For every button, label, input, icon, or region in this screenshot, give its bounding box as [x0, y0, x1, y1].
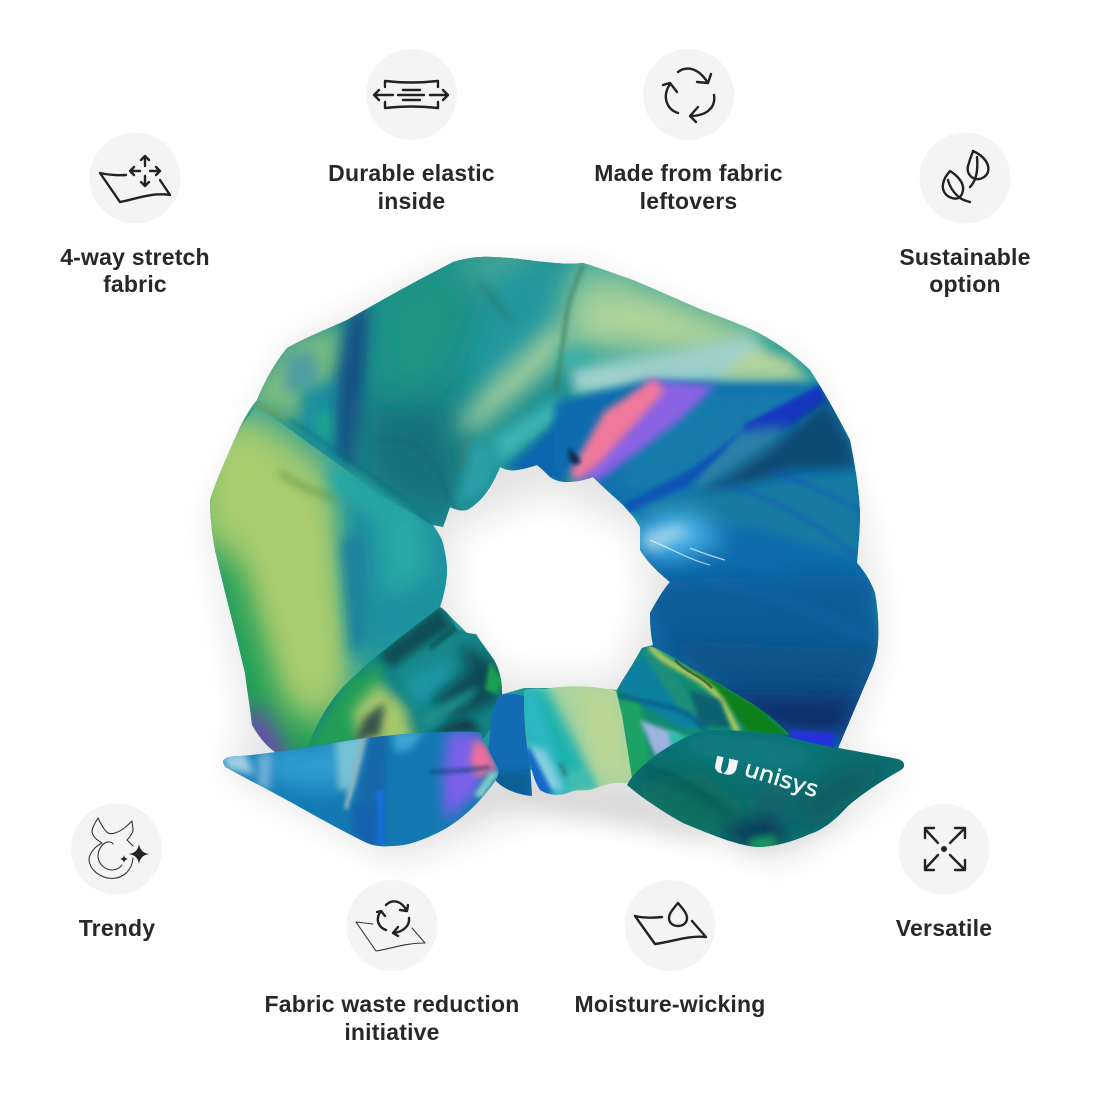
- label: Fabric waste reduction: [265, 991, 519, 1017]
- feature: durable elastic inside: [328, 49, 495, 214]
- feature: fabric waste reduction initiative: [265, 880, 519, 1045]
- pink and violet streak: [568, 378, 715, 482]
- green folded knot panel: [617, 646, 790, 778]
- label: initiative: [344, 1019, 440, 1045]
- label: fabric: [103, 271, 167, 297]
- icon: four outward arrows: [925, 828, 965, 870]
- scrunchie product: [190, 240, 910, 855]
- logo mark: [714, 756, 738, 776]
- upper left folded panel: [240, 256, 586, 527]
- right bow tail: [627, 730, 904, 847]
- scrunchie drop shadow: [212, 268, 905, 860]
- icon: recycling arrows: [663, 69, 714, 122]
- feature: sustainable option: [899, 132, 1031, 297]
- blue right folds: [622, 385, 862, 565]
- center knot blue band: [488, 694, 532, 796]
- icon: elastic band with horizontal arrows: [374, 81, 448, 108]
- icon: stretching fabric with four arrows: [100, 156, 170, 202]
- deep blue lower right body: [640, 575, 885, 752]
- infographic canvas: [60, 49, 1030, 1040]
- icon: fabric sheet with water drop: [635, 903, 706, 944]
- fold crease across left shoulder: [256, 404, 430, 523]
- feature: trendy: [71, 804, 162, 941]
- logo wordmark: unisys: [741, 757, 821, 803]
- icon: large sparkle: [129, 844, 149, 864]
- gathered lower left folds: [308, 607, 502, 747]
- top right pale lime panel: [553, 255, 880, 760]
- feature: versatile: [896, 804, 992, 941]
- label: leftovers: [640, 188, 737, 214]
- label: Sustainable: [899, 244, 1031, 270]
- left bow tail: [223, 732, 498, 846]
- label: Made from fabric: [594, 160, 783, 186]
- label: 4-way stretch: [60, 244, 210, 270]
- unisys logo: [714, 756, 821, 803]
- label: Versatile: [896, 915, 992, 941]
- left lime and green bands: [210, 402, 456, 752]
- label: Durable elastic: [328, 160, 495, 186]
- icon: fabric sheet with recycling arrows: [356, 901, 425, 951]
- feature: 4-way stretch fabric: [60, 132, 210, 297]
- label: option: [929, 271, 1001, 297]
- icon: two leaves: [943, 151, 988, 202]
- feature: made from fabric leftovers: [594, 49, 783, 214]
- feature: moisture-wicking: [574, 880, 766, 1017]
- label: Moisture-wicking: [574, 991, 766, 1017]
- label: Trendy: [79, 915, 155, 941]
- label: inside: [378, 188, 445, 214]
- icon: scrunchie with ears and sparkles: [89, 818, 149, 878]
- fabric ring body: [190, 240, 890, 780]
- icon: small sparkle: [120, 855, 128, 863]
- center knot striped band: [524, 686, 632, 795]
